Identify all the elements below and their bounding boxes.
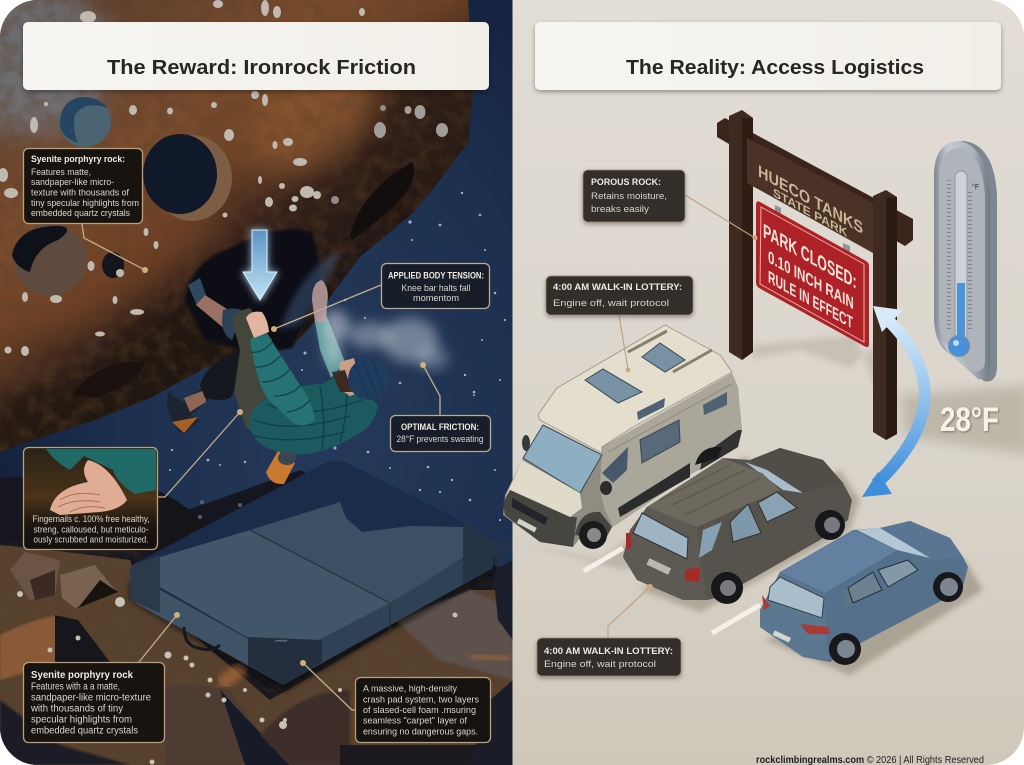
pad top, lit area right half [250,502,463,603]
callout: syenite porphyry rock (upper): embedded quartz crystals [31,208,130,218]
van silhouette [503,455,613,547]
callout: fingernails with hands inset: streng, calloused, but meticulo- [34,524,148,534]
callout: syenite porphyry rock (lower): sandpaper-like micro-texture [31,692,151,704]
title card: the reality: The Reality: Access Logistics [626,57,924,79]
climber [167,278,390,484]
beanie and face [338,358,356,396]
panel: the reward (left scene) [0,0,513,765]
callout: syenite porphyry rock (upper): Features matte, [31,167,91,177]
callout: syenite porphyry rock (upper): texture with thousands of [31,188,129,198]
white quartz pebbles [0,0,448,356]
icon: thermometer: °F [972,183,980,191]
callout: crash pad system: A massive, high-density [363,684,457,694]
raised arm and hand [315,317,345,378]
icon: gravity arrow [243,230,277,300]
callout: applied body tension: momentom [413,293,459,303]
callout: crash pad system [356,678,490,742]
suv silhouette [623,448,852,600]
olive trousers [232,308,272,432]
park name lettering: HUECO TANKS [758,162,863,238]
callout: walk-in lottery (lower): Engine off, wait protocol [544,659,656,670]
callout: crash pad system: crash pad system, two layers [363,694,479,706]
callout: fingernails with hands inset: ously scrubbed and moisturized. [34,534,148,544]
callout: syenite porphyry rock (upper) [24,148,142,224]
icon: thermometer [934,141,997,381]
closure board [756,201,869,347]
callout: applied body tension: Knee bar halts fall [402,283,470,293]
vehicle: camper van [503,325,742,549]
panel: the reality (right scene) [503,0,1024,765]
leader lines [82,224,440,710]
leader lines [608,195,755,638]
pad top, lit area left half [160,530,389,640]
vehicle: blue hatchback [760,521,968,665]
closure board: RULE IN EFFECT [768,267,853,333]
gripping hand [246,312,269,338]
inset: clasped hands [46,449,156,515]
jacket sleeve [250,334,315,426]
callout: syenite porphyry rock (lower): with thousands of tiny [30,704,123,714]
parking lines [584,548,760,633]
callout: walk-in lottery (lower) [537,638,681,676]
chalk bag [266,451,295,484]
temperature shadow band [900,385,1024,455]
icon: crash pad: crashpad [275,638,288,642]
title card: the reality [535,22,1001,90]
callout: syenite porphyry rock (upper): tiny specular highlights from [31,198,139,208]
cave behind climber [185,229,319,352]
callout: applied body tension: APPLIED BODY TENSION: [388,270,484,280]
vehicle: dark suv [623,448,852,604]
ground shadows [510,335,983,675]
sign: hueco tanks state park [717,110,913,440]
park name lettering: STATE PARK [773,185,848,240]
posts and beam [717,118,913,246]
closure board: 0.10 INCH RAIN [768,247,854,314]
callout: porous rock: Retains moisture, [591,191,667,202]
stars and snow [169,192,506,521]
hueco holes [59,97,111,147]
callout: walk-in lottery (upper) [546,276,693,315]
callout: porous rock [583,170,685,222]
callout: crash pad system: seamless "carpet" layer of [363,716,467,726]
hatchback silhouette [760,521,968,662]
arrow: temperature double-headed arrow [862,306,925,497]
callout: optimal friction: 28°F prevents sweating [396,434,484,444]
callout: crash pad system: ensuring no dangerous gaps. [363,726,478,738]
callout: syenite porphyry rock (lower): embedded quartz crystals [31,726,138,736]
closure board: PARK CLOSED: [763,220,857,294]
callout: applied body tension [382,264,490,308]
ground rocks [0,470,513,765]
pad sides [130,590,283,685]
callout: syenite porphyry rock (lower): Syenite porphyry rock [31,670,133,681]
callout: syenite porphyry rock (upper): Syenite porphyry rock: [31,154,125,164]
title card: the reward [23,22,489,90]
callout: walk-in lottery (upper): 4:00 AM WALK-IN LOTTERY: [553,281,682,292]
title card: the reward: The Reward: Ironrock Friction [107,57,416,79]
callout: syenite porphyry rock (lower): specular highlights from [31,714,132,726]
callout: fingernails with hands inset: Fingernails c. 100% free healthy, [32,514,150,524]
lower leg and shoe [167,386,208,434]
breath cloud [321,310,448,370]
icon: crash pad [130,461,493,692]
label: 28°F: 28°F [940,401,999,439]
callout: syenite porphyry rock (lower): Features with a a matte, [31,682,120,692]
callout: walk-in lottery (upper): Engine off, wait protocol [553,298,669,309]
pad top, shadowed by the climber [130,461,463,638]
callout: porous rock: breaks easily [591,204,649,215]
callout: syenite porphyry rock (upper): sandpaper-like micro- [31,177,114,187]
callout: fingernails with hands inset [24,448,158,550]
rock overhang with huecos [0,0,480,460]
callout: crash pad system: of slased-cell foam .msuring [363,705,476,716]
rear leg [188,278,207,306]
jacket torso [249,372,378,455]
callout: optimal friction [390,416,490,452]
callout: optimal friction: OPTIMAL FRICTION: [401,422,479,432]
callout: porous rock: POROUS ROCK: [591,176,661,187]
callout: walk-in lottery (lower): 4:00 AM WALK-IN LOTTERY: [544,645,673,656]
callout: syenite porphyry rock (lower) [24,662,164,742]
